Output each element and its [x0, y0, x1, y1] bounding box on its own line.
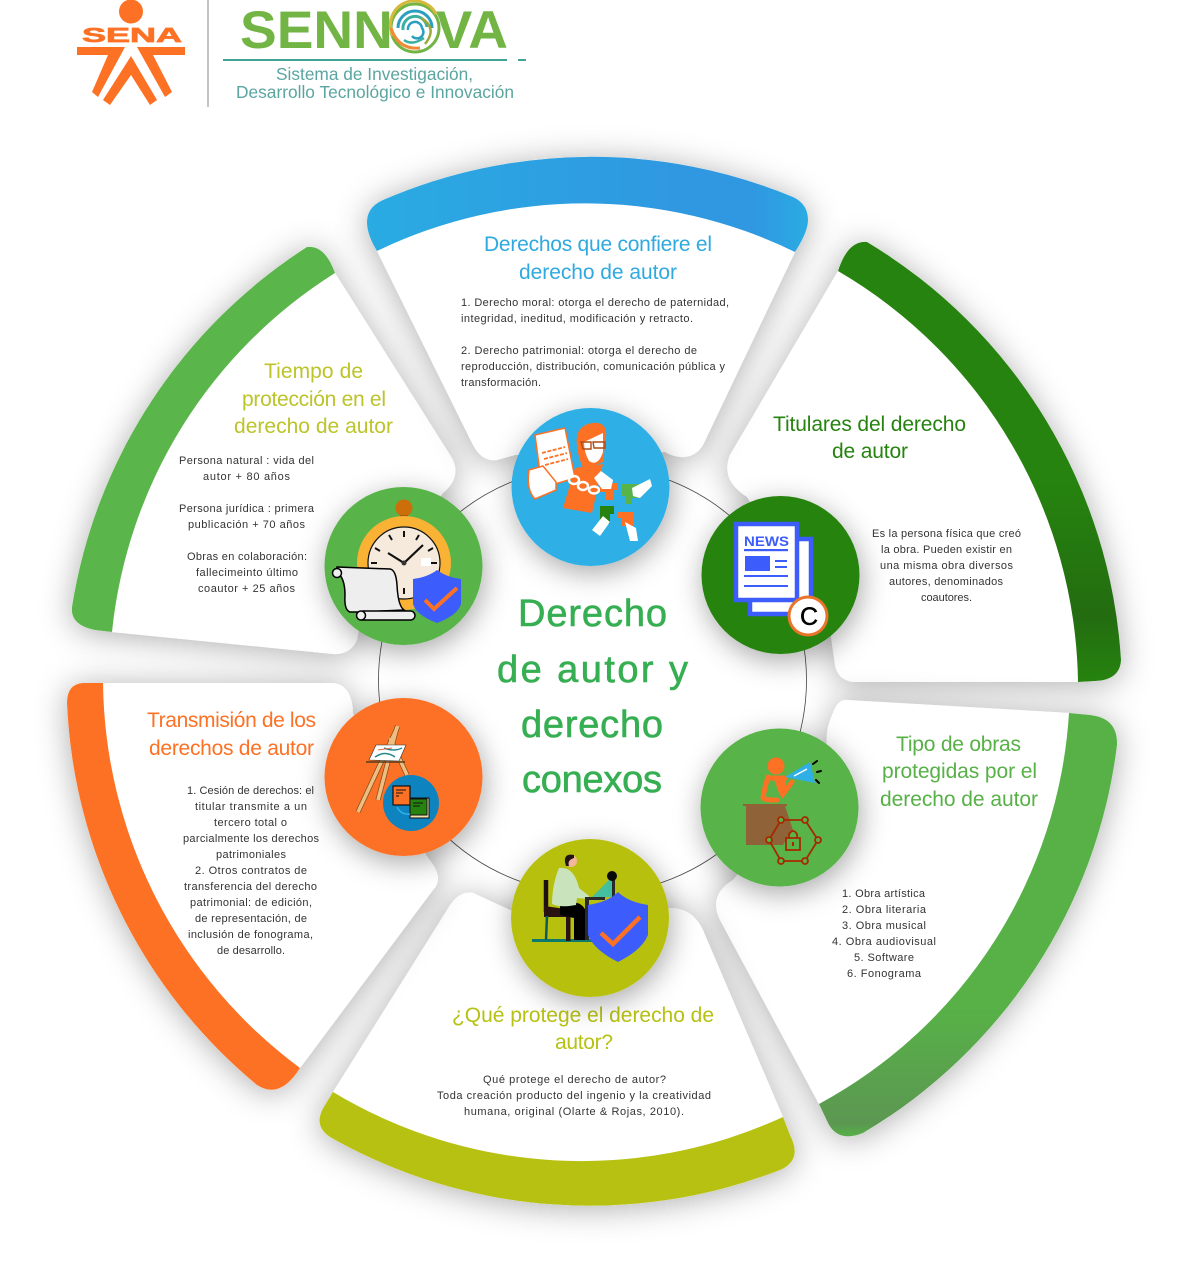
text block: 1. Obra artística	[842, 888, 926, 900]
title: conexos	[522, 759, 662, 801]
text block: Es la persona física que creó	[872, 528, 1021, 540]
text block: de desarrollo.	[217, 945, 285, 957]
icon: easel and books	[324, 698, 482, 856]
heading: derecho de autor	[234, 415, 393, 438]
heading	[484, 233, 712, 284]
heading: Derechos que confiere el	[484, 233, 712, 256]
logo: SENA: SENA	[82, 25, 182, 47]
text block	[437, 1074, 711, 1118]
heading	[773, 413, 966, 463]
text block: 2. Otros contratos de	[195, 865, 307, 877]
heading: Titulares del derecho	[773, 413, 966, 436]
text block: patrimonial: de edición,	[190, 897, 312, 909]
text block: inclusión de fonograma,	[188, 929, 313, 941]
text block: 4. Obra audiovisual	[832, 936, 936, 948]
icon: news copyright	[702, 496, 860, 654]
text block: transformación.	[461, 377, 541, 389]
title: de autor y	[497, 649, 688, 691]
text block: fallecimeinto último	[196, 567, 298, 579]
text block	[832, 888, 936, 980]
text block	[872, 528, 1021, 604]
heading: Tiempo de	[264, 360, 363, 383]
heading: Tipo de obras	[896, 733, 1021, 756]
text block: Qué protege el derecho de autor?	[483, 1074, 666, 1086]
text block: publicación + 70 años	[188, 519, 306, 531]
text block: autor + 80 años	[203, 471, 290, 483]
text block: de representación, de	[195, 913, 307, 925]
panel: transmisión	[67, 683, 438, 1090]
icon: clock, scroll and shield	[324, 487, 482, 645]
text block: integridad, ineditud, modificación y retracto.	[461, 313, 693, 325]
text block: 1. Cesión de derechos: el	[187, 785, 314, 797]
heading	[452, 1004, 714, 1054]
text block	[183, 785, 320, 957]
heading: protegidas por el	[882, 760, 1037, 783]
icon: person at desk and shield	[511, 839, 669, 997]
heading	[234, 360, 393, 438]
heading: autor?	[555, 1031, 613, 1054]
text block: titular transmite a un	[195, 801, 307, 813]
text block: Obras en colaboración:	[187, 551, 307, 563]
heading: derechos de autor	[149, 737, 314, 760]
logo: SENNOVA: Desarrollo Tecnológico e Innovación	[236, 82, 514, 102]
text block: transferencia del derecho	[184, 881, 317, 893]
heading	[880, 733, 1038, 811]
logo: SENNOVA: SENNOVA	[240, 1, 508, 60]
text block: reproducción, distribución, comunicación pública y	[461, 361, 726, 373]
text block: parcialmente los derechos	[183, 833, 320, 845]
text block: patrimoniales	[216, 849, 286, 861]
text block: 6. Fonograma	[847, 968, 922, 980]
icon: news copyright: NEWS	[744, 533, 789, 549]
panel: derechos que confiere	[367, 157, 808, 460]
text block: 2. Derecho patrimonial: otorga el derecho de	[461, 345, 697, 357]
text block: autores, denominados	[889, 576, 1004, 588]
title: Derecho	[518, 593, 667, 635]
text block: 5. Software	[854, 952, 914, 964]
logo: SENA	[77, 0, 185, 105]
heading: Transmisión de los	[147, 709, 316, 732]
text block: la obra. Pueden existir en	[881, 544, 1012, 556]
title	[497, 593, 688, 801]
icon: speaker and lock	[700, 728, 858, 886]
text block: Persona jurídica : primera	[179, 503, 315, 515]
panel: tiempo de protección	[72, 247, 455, 654]
text block: humana, original (Olarte & Rojas, 2010).	[464, 1106, 684, 1118]
logo: SENNOVA: Sistema de Investigación,	[276, 64, 473, 84]
icon: news copyright: C	[800, 603, 818, 631]
heading	[147, 709, 316, 760]
heading: derecho de autor	[519, 261, 677, 284]
panel: titulares	[727, 242, 1121, 682]
panel: tipo de obras	[716, 700, 1117, 1136]
text block: 1. Derecho moral: otorga el derecho de paternidad,	[461, 297, 729, 309]
text block: tercero total o	[214, 817, 287, 829]
text block: Persona natural : vida del	[179, 455, 314, 467]
title: derecho	[521, 704, 663, 746]
text block: 2. Obra literaria	[842, 904, 927, 916]
logo: SENNOVA	[223, 1, 526, 102]
text block: 3. Obra musical	[842, 920, 926, 932]
text block: Toda creación producto del ingenio y la creatividad	[437, 1090, 711, 1102]
text block	[179, 455, 315, 595]
heading: protección en el	[242, 388, 386, 411]
text block: una misma obra diversos	[880, 560, 1014, 572]
text block: coautor + 25 años	[198, 583, 296, 595]
panel: qué protege	[320, 893, 795, 1206]
heading: derecho de autor	[880, 788, 1038, 811]
text block	[461, 297, 729, 389]
heading: de autor	[832, 440, 908, 463]
text block: coautores.	[921, 592, 972, 604]
icon: man with document and puzzle	[512, 408, 670, 566]
heading: ¿Qué protege el derecho de	[452, 1004, 714, 1027]
